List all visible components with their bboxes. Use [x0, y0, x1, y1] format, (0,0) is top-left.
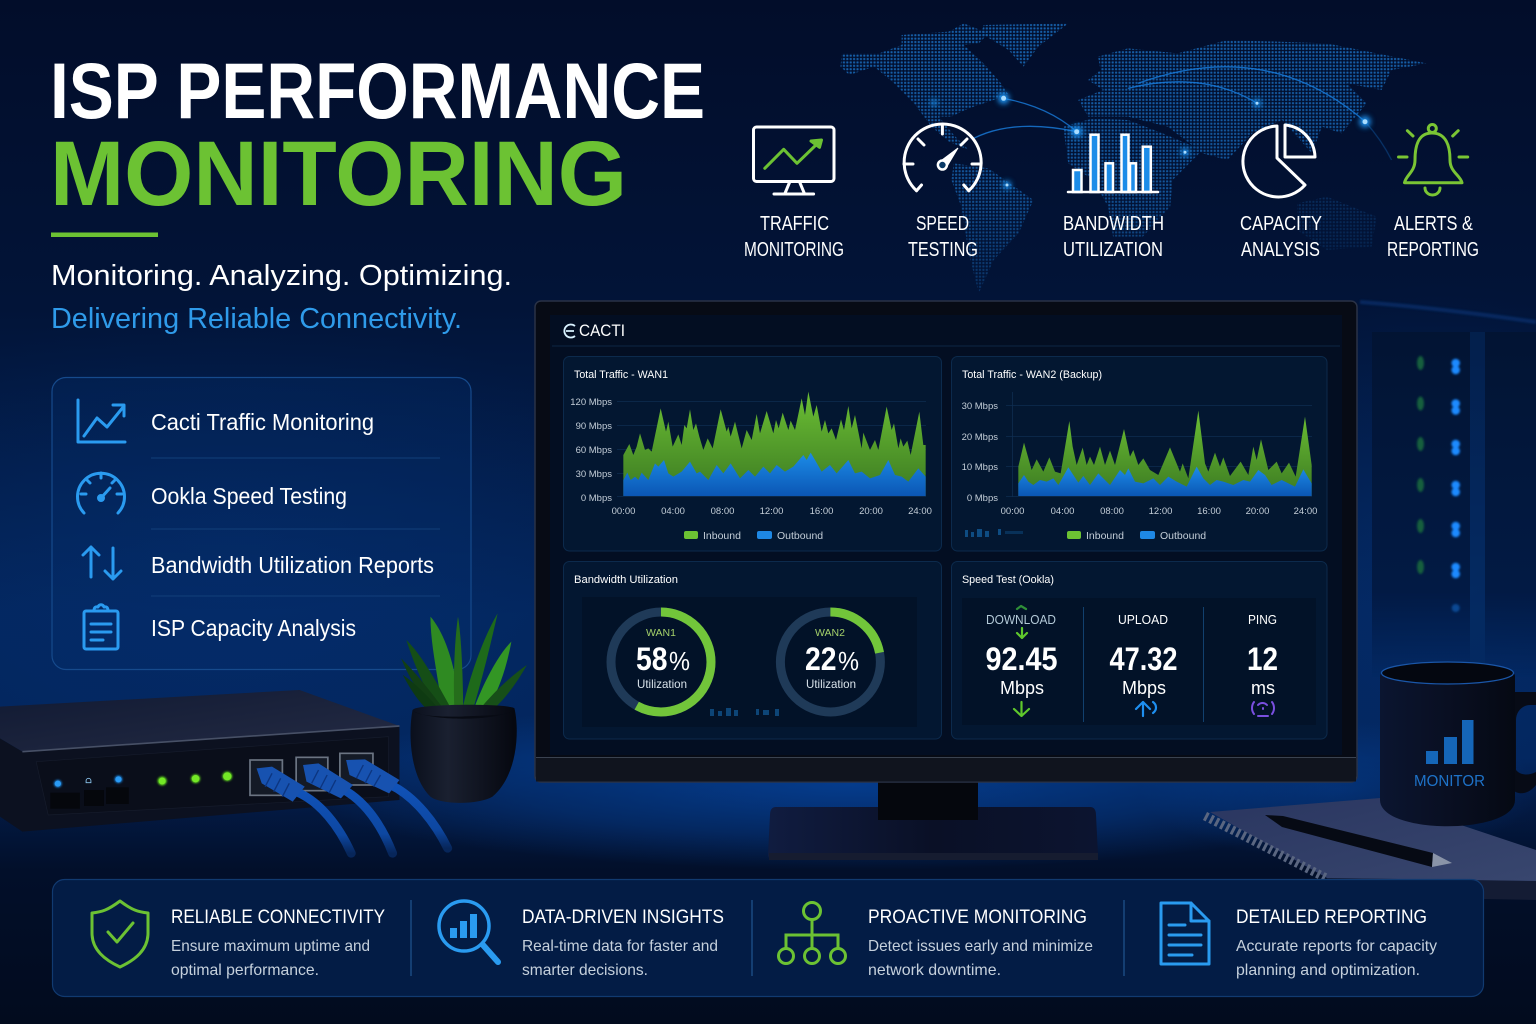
- y axis labels: [962, 401, 998, 504]
- benefit: detailed reporting: Accurate reports for capacity: [1236, 938, 1437, 955]
- tagline: Monitoring. Analyzing. Optimizing.: [51, 260, 512, 292]
- gauge: WAN1: WAN1: [646, 627, 676, 639]
- label: traffic monitoring: TRAFFIC: [760, 213, 829, 235]
- benefit: reliable connectivity: [92, 901, 385, 979]
- glitch marks: [965, 529, 1023, 537]
- glitch marks: [710, 708, 779, 716]
- x axis labels: 04:00: [1051, 506, 1074, 517]
- tagline: Delivering Reliable Connectivity.: [51, 303, 462, 335]
- label: bandwidth utilization: BANDWIDTH: [1063, 213, 1164, 235]
- x axis labels: 12:00: [760, 506, 783, 517]
- icon: magnifier: [439, 901, 498, 962]
- icon: capacity analysis: [1243, 125, 1315, 197]
- item: ISP Capacity Analysis: [84, 605, 356, 649]
- label: speed testing: SPEED: [916, 213, 969, 235]
- panel: speed test: Speed Test (Ookla): [962, 574, 1054, 586]
- area chart: [1018, 411, 1312, 496]
- top feature icons: [744, 124, 1479, 261]
- x axis labels: 12:00: [1149, 506, 1172, 517]
- legend: Outbound: [1160, 530, 1206, 542]
- label: alerts and reporting: REPORTING: [1387, 239, 1479, 261]
- panel: bottom benefits: [52, 880, 1484, 996]
- gauge: WAN2: %: [838, 646, 859, 676]
- item: Ookla Speed Testing: Ookla Speed Testing: [151, 483, 347, 509]
- benefit: data-driven insights: smarter decisions.: [522, 962, 648, 979]
- benefit: detailed reporting: DETAILED REPORTING: [1236, 907, 1427, 928]
- legend: Inbound: [703, 530, 741, 542]
- gauge: WAN2: [780, 612, 880, 712]
- icon: alerts and reporting: [1398, 124, 1468, 195]
- coffee mug: MONITOR: [1414, 773, 1485, 790]
- title: MONITORING: [50, 123, 627, 225]
- x axis labels: 08:00: [711, 506, 734, 517]
- label: bandwidth utilization: UTILIZATION: [1063, 239, 1163, 261]
- metric: download: Mbps: [1000, 678, 1044, 698]
- gauge: WAN1: Utilization: [637, 677, 687, 691]
- label: traffic monitoring: MONITORING: [744, 239, 844, 261]
- y axis labels: 30 Mbps: [576, 469, 612, 480]
- item: Bandwidth Utilization Reports: [83, 547, 434, 579]
- legend: [684, 530, 823, 542]
- benefit: detailed reporting: [1161, 903, 1437, 979]
- panel: WAN2 traffic: Total Traffic - WAN2 (Backup): [962, 369, 1102, 381]
- y axis labels: 30 Mbps: [962, 401, 998, 412]
- network router: [0, 690, 448, 853]
- router slots: [50, 787, 129, 809]
- legend: [1067, 530, 1206, 542]
- gauge: WAN1: 58: [636, 641, 668, 677]
- benefit: detailed reporting: planning and optimization.: [1236, 962, 1420, 979]
- legend: Inbound: [1086, 530, 1124, 542]
- coffee mug: [1380, 662, 1536, 826]
- benefit: data-driven insights: Real-time data for faster and: [522, 938, 718, 955]
- potted plant: [401, 613, 527, 803]
- icon: bandwidth utilization: [1068, 135, 1158, 192]
- label: alerts and reporting: ALERTS &: [1394, 213, 1474, 235]
- label: speed testing: TESTING: [908, 239, 978, 261]
- gauge: WAN1: %: [669, 646, 690, 676]
- panel: feature list: [52, 378, 471, 670]
- metric: download: DOWNLOAD: [986, 612, 1056, 627]
- y axis labels: [570, 397, 612, 504]
- metric: ping: ms: [1251, 678, 1275, 698]
- mug logo: [1426, 720, 1474, 764]
- panel: WAN1 traffic: [564, 356, 942, 551]
- item: Ookla Speed Testing: [77, 473, 347, 513]
- metric: ping: [1247, 612, 1278, 716]
- benefit: proactive monitoring: [778, 902, 1093, 979]
- legend: Outbound: [777, 530, 823, 542]
- x axis labels: 24:00: [908, 506, 932, 517]
- y axis labels: 10 Mbps: [962, 462, 998, 473]
- icon: speed testing: [904, 124, 981, 191]
- x axis labels: 00:00: [612, 506, 635, 517]
- ethernet cables: [296, 785, 448, 853]
- x axis labels: 08:00: [1100, 506, 1124, 517]
- title: [50, 46, 705, 225]
- benefit: proactive monitoring: network downtime.: [868, 962, 1001, 979]
- item: Cacti Traffic Monitoring: [78, 400, 374, 442]
- map network nodes: [931, 93, 1370, 189]
- label: capacity analysis: [1240, 213, 1322, 261]
- icon: shield: [92, 901, 148, 967]
- item: ISP Capacity Analysis: ISP Capacity Analysis: [151, 615, 356, 641]
- label: alerts and reporting: [1387, 213, 1479, 261]
- benefit: data-driven insights: [439, 901, 724, 979]
- metric: upload: UPLOAD: [1118, 612, 1168, 627]
- monitor frame: [535, 301, 1357, 782]
- label: capacity analysis: CAPACITY: [1240, 213, 1322, 235]
- panel: bandwidth utilization: Bandwidth Utilization: [574, 574, 678, 586]
- label: speed testing: [908, 213, 978, 261]
- panel: WAN2 traffic: [952, 356, 1327, 551]
- gauge: WAN2: 22: [805, 641, 836, 677]
- metric: upload: [1110, 612, 1178, 716]
- router ports: [250, 753, 373, 795]
- metric: ping: 12: [1247, 641, 1278, 677]
- label: traffic monitoring: [744, 213, 844, 261]
- area chart: [623, 392, 926, 496]
- monitor stand: [768, 780, 1098, 860]
- gauge: WAN2: Utilization: [806, 677, 856, 691]
- x axis labels: 16:00: [810, 506, 833, 517]
- world map: [840, 23, 1426, 293]
- x axis labels: [612, 506, 932, 517]
- y axis labels: 60 Mbps: [576, 445, 612, 456]
- pen: [1265, 815, 1452, 867]
- x axis labels: 20:00: [1246, 506, 1269, 517]
- router status lights: [54, 772, 232, 787]
- monitor: [535, 301, 1357, 860]
- panel: WAN1 traffic: Total Traffic - WAN1: [574, 369, 668, 381]
- x axis labels: 04:00: [661, 506, 685, 517]
- icon: document: [1161, 903, 1209, 964]
- gauge: WAN2: WAN2: [815, 627, 845, 639]
- tagline: [51, 260, 512, 335]
- y axis labels: 90 Mbps: [576, 421, 612, 432]
- panel: bandwidth utilization: [564, 562, 942, 739]
- metric: download: [986, 606, 1058, 716]
- x axis labels: 00:00: [1001, 506, 1024, 517]
- gauge: WAN1: [611, 612, 711, 712]
- metric: upload: Mbps: [1122, 678, 1166, 698]
- item: Cacti Traffic Monitoring: Cacti Traffic Monitoring: [151, 409, 374, 435]
- y axis labels: 120 Mbps: [570, 397, 612, 408]
- benefit: proactive monitoring: PROACTIVE MONITORING: [868, 907, 1087, 928]
- y axis labels: 0 Mbps: [581, 493, 612, 504]
- icon: network tree: [778, 902, 846, 964]
- benefit: proactive monitoring: Detect issues early and minimize: [868, 938, 1093, 955]
- metric: download: 92.45: [986, 641, 1058, 677]
- label: capacity analysis: ANALYSIS: [1241, 239, 1320, 261]
- title underline: [51, 232, 158, 237]
- icon: traffic monitoring: [754, 127, 834, 194]
- notebook: [1205, 798, 1536, 900]
- x axis labels: 20:00: [859, 506, 883, 517]
- label: bandwidth utilization: [1063, 213, 1164, 261]
- dashboard header: CACTI: [579, 322, 625, 340]
- item: Bandwidth Utilization Reports: Bandwidth Utilization Reports: [151, 552, 434, 578]
- server rack background: [1360, 302, 1536, 677]
- y axis labels: 0 Mbps: [967, 493, 998, 504]
- metric: ping: PING: [1248, 612, 1277, 627]
- benefit: reliable connectivity: RELIABLE CONNECTIVITY: [171, 907, 385, 928]
- benefit: reliable connectivity: optimal performance.: [171, 962, 319, 979]
- benefit: reliable connectivity: Ensure maximum uptime and: [171, 938, 370, 955]
- screen: [550, 315, 1342, 755]
- x axis labels: 16:00: [1197, 506, 1221, 517]
- panel: speed test: [952, 562, 1327, 739]
- title: ISP PERFORMANCE: [50, 46, 705, 135]
- metric: upload: 47.32: [1110, 641, 1178, 677]
- y axis labels: 20 Mbps: [962, 432, 998, 443]
- x axis labels: 24:00: [1294, 506, 1317, 517]
- x axis labels: [1001, 506, 1317, 517]
- benefit: data-driven insights: DATA-DRIVEN INSIGHTS: [522, 907, 724, 928]
